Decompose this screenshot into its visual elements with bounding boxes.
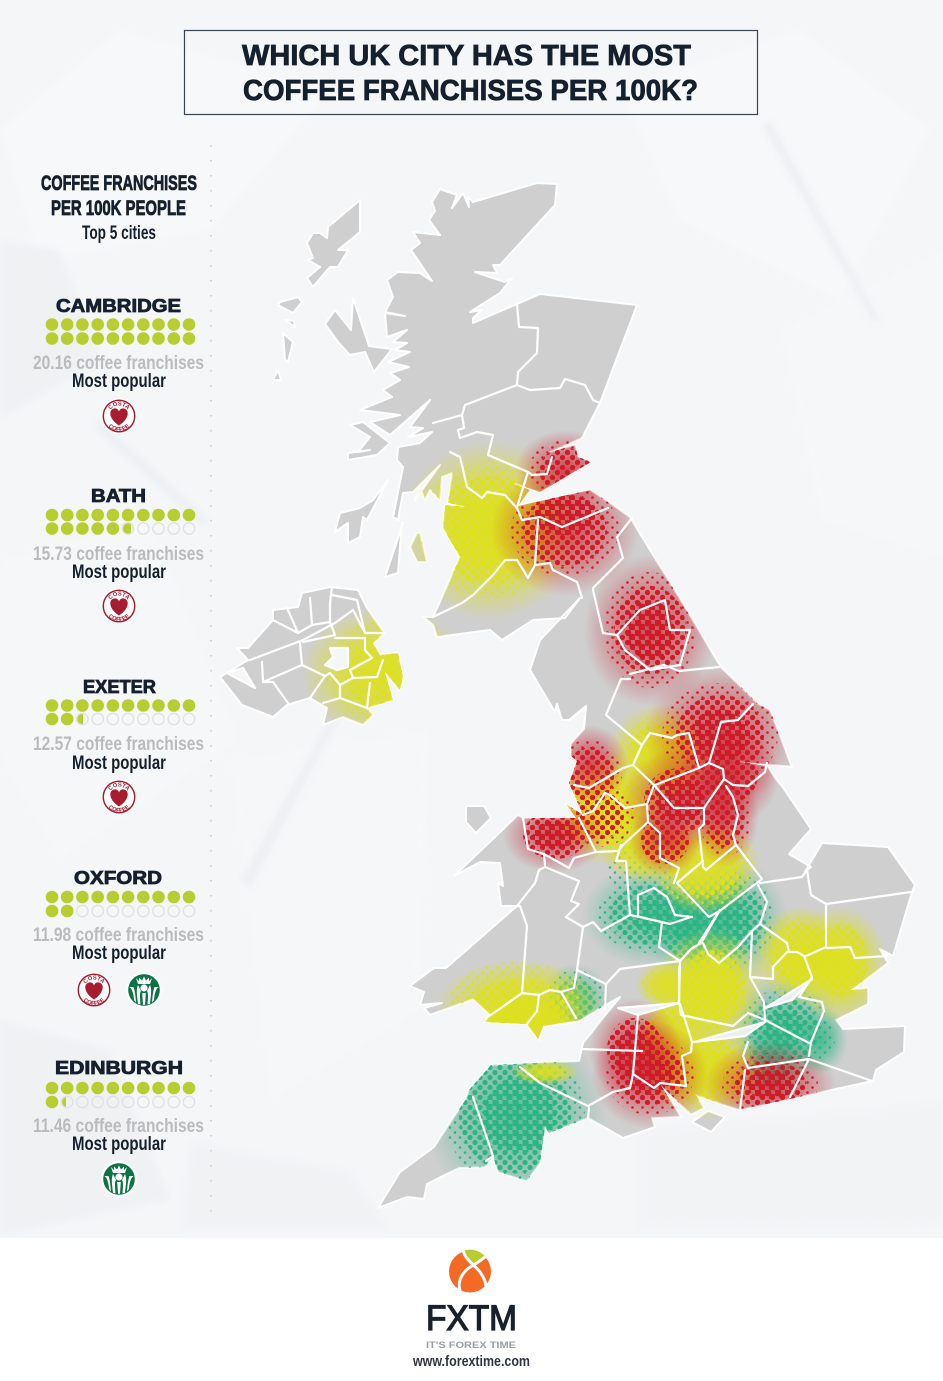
icon: FXTM mark bbox=[449, 1250, 491, 1292]
sidebar heading: PER 100K PEOPLE bbox=[51, 197, 186, 220]
red regions (Costa) bbox=[491, 430, 836, 1129]
most popular label: Most popular bbox=[72, 370, 166, 392]
city: Cambridge bbox=[33, 296, 204, 434]
sidebar heading bbox=[41, 172, 197, 244]
city name: EDINBURGH bbox=[55, 1058, 183, 1078]
teal regions (Starbucks) bbox=[434, 846, 846, 1181]
most popular label: Most popular bbox=[72, 942, 166, 964]
icon: Starbucks logo bbox=[126, 972, 162, 1008]
count text: 11.98 coffee franchises bbox=[33, 924, 204, 946]
land: Great Britain and islands bbox=[220, 183, 915, 1208]
icon: Costa logo: COFFEE bbox=[109, 804, 130, 812]
website: www.forextime.com bbox=[412, 1353, 530, 1370]
brand name: FXTM bbox=[426, 1299, 517, 1338]
Scotland region borders bbox=[433, 304, 690, 670]
city: Bath bbox=[33, 486, 204, 624]
title box: COFFEE FRANCHISES PER 100K? bbox=[243, 75, 698, 107]
dot rating 11.98 bbox=[46, 891, 195, 917]
icon: Costa logo bbox=[101, 779, 137, 815]
title box bbox=[184, 30, 758, 114]
map of the UK bbox=[220, 183, 915, 1208]
icon: Starbucks logo bbox=[101, 1161, 137, 1197]
city name: CAMBRIDGE bbox=[56, 296, 181, 316]
icon: Costa logo bbox=[101, 588, 137, 624]
icon: Costa logo: COFFEE bbox=[109, 614, 130, 621]
dotted divider bbox=[210, 145, 212, 1215]
icon: Costa logo: COSTA bbox=[108, 592, 130, 600]
city: Edinburgh bbox=[33, 1058, 204, 1197]
icon: Costa logo: COFFEE bbox=[84, 998, 104, 1005]
yellow regions bbox=[301, 440, 888, 1120]
England and Wales region borders bbox=[473, 665, 911, 1161]
footer band bbox=[0, 1238, 943, 1381]
title box: WHICH UK CITY HAS THE MOST bbox=[242, 40, 691, 72]
dot rating 20.16 bbox=[46, 318, 195, 345]
most popular label: Most popular bbox=[72, 561, 166, 583]
dot rating 11.46 bbox=[46, 1082, 195, 1108]
icon: Costa logo: COSTA bbox=[108, 782, 130, 791]
most popular label: Most popular bbox=[72, 752, 166, 774]
count text: 20.16 coffee franchises bbox=[33, 352, 204, 374]
Northern Ireland borders bbox=[227, 587, 384, 708]
dot rating 15.73 bbox=[46, 509, 195, 535]
icon: Costa logo bbox=[76, 972, 112, 1008]
most popular label: Most popular bbox=[72, 1133, 166, 1155]
tagline: IT'S FOREX TIME bbox=[426, 1340, 516, 1351]
sidebar heading: Top 5 cities bbox=[82, 222, 156, 244]
city name: EXETER bbox=[83, 677, 156, 697]
icon: Costa logo: COFFEE bbox=[109, 424, 130, 431]
city: Exeter bbox=[33, 677, 204, 815]
icon: Costa logo: COSTA bbox=[108, 402, 130, 410]
city name: OXFORD bbox=[74, 868, 162, 888]
heat overlay: halftone regions bbox=[301, 430, 888, 1207]
count text: 12.57 coffee franchises bbox=[33, 733, 204, 755]
footer logo: FXTM bbox=[412, 1250, 530, 1370]
count text: 15.73 coffee franchises bbox=[33, 543, 204, 565]
icon: Costa logo bbox=[101, 398, 137, 434]
dot rating 12.57 bbox=[46, 699, 195, 725]
city: Oxford bbox=[33, 868, 204, 1008]
sidebar heading: COFFEE FRANCHISES bbox=[41, 172, 197, 195]
count text: 11.46 coffee franchises bbox=[33, 1115, 204, 1137]
city name: BATH bbox=[91, 486, 146, 506]
icon: Costa logo: COSTA bbox=[83, 976, 104, 984]
